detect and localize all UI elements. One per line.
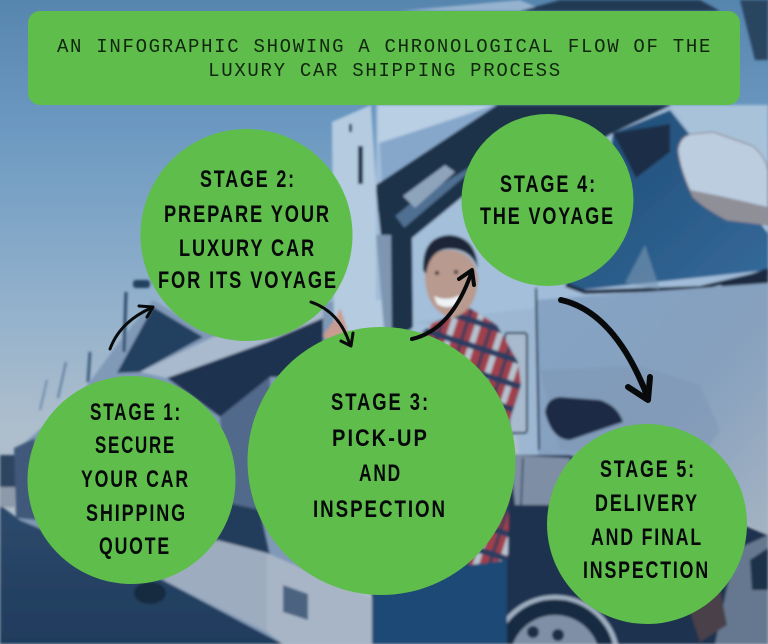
- stage 4 text: [480, 171, 615, 230]
- stage 3 circle: [248, 327, 516, 595]
- stage 2 text: STAGE 2:: [200, 166, 296, 193]
- arrow: stage 1 to stage 2: [110, 306, 153, 349]
- passenger reflection: [625, 245, 660, 290]
- stage 1 text: SECURE: [95, 432, 176, 459]
- stage 1 text: YOUR CAR: [81, 466, 190, 493]
- windshield: [565, 110, 768, 290]
- stage 5 text: STAGE 5:: [600, 456, 696, 483]
- stage 1 text: STAGE 1:: [90, 399, 182, 426]
- man: head: [423, 235, 478, 318]
- hand: [323, 308, 350, 345]
- stage 5 text: INSPECTION: [583, 557, 710, 584]
- arrow: stage 3 to stage 4: [412, 270, 474, 339]
- top strip above banner: [400, 0, 545, 11]
- stage 1 text: SHIPPING: [86, 500, 187, 527]
- stage 5 circle: [547, 424, 747, 624]
- stage 3 text: INSPECTION: [313, 496, 447, 523]
- stage 1 text: [81, 399, 190, 560]
- stage 1 circle: [28, 376, 236, 584]
- door gap: [376, 190, 413, 340]
- stage 5 text: AND FINAL: [591, 524, 703, 551]
- stage 3 text: AND: [359, 460, 402, 487]
- ground: [0, 505, 283, 644]
- stage 4 text: STAGE 4:: [500, 171, 597, 198]
- truck cab upper light panels: [376, 105, 768, 300]
- wheel: [492, 595, 618, 644]
- side mirror: [678, 132, 768, 225]
- stage 5 text: DELIVERY: [595, 490, 699, 517]
- distant vehicle: [0, 455, 19, 507]
- window frame: [566, 272, 768, 292]
- stage 5 text: [583, 456, 710, 584]
- stage 2 text: PREPARE YOUR: [164, 201, 331, 228]
- truck step and lamp: [690, 535, 768, 644]
- title text: LUXURY CAR SHIPPING PROCESS: [208, 60, 562, 82]
- stage 2 text: [158, 166, 338, 294]
- title banner: [28, 11, 740, 105]
- car carrier trailer: [14, 280, 375, 644]
- sun visor: [613, 124, 670, 178]
- lower cab door: [535, 283, 768, 535]
- stage 4 circle: [462, 114, 634, 286]
- stage 2 circle: [140, 129, 352, 341]
- door handle: [545, 397, 623, 440]
- arrow: stage 4 to stage 5: [561, 300, 650, 400]
- stage 3 text: STAGE 3:: [331, 389, 430, 416]
- stage 2 text: FOR ITS VOYAGE: [158, 267, 338, 294]
- stage 3 text: PICK-UP: [332, 425, 429, 452]
- arrow: stage 2 to stage 3: [311, 302, 353, 346]
- stage 2 text: LUXURY CAR: [179, 235, 316, 262]
- tall headboard column: [332, 105, 392, 345]
- door upper panel: [413, 180, 535, 340]
- stage 1 text: QUOTE: [99, 533, 171, 560]
- man: jeans: [372, 540, 507, 644]
- dark diagonal band: [376, 105, 672, 238]
- stage 3 text: [313, 389, 447, 523]
- wheel arch and lower body: [505, 455, 768, 644]
- title text: AN INFOGRAPHIC SHOWING A CHRONOLOGICAL FLOW OF THE: [57, 36, 712, 58]
- man: shirt: [410, 308, 521, 565]
- upper right cab: [670, 105, 768, 233]
- stage 4 text: THE VOYAGE: [480, 203, 615, 230]
